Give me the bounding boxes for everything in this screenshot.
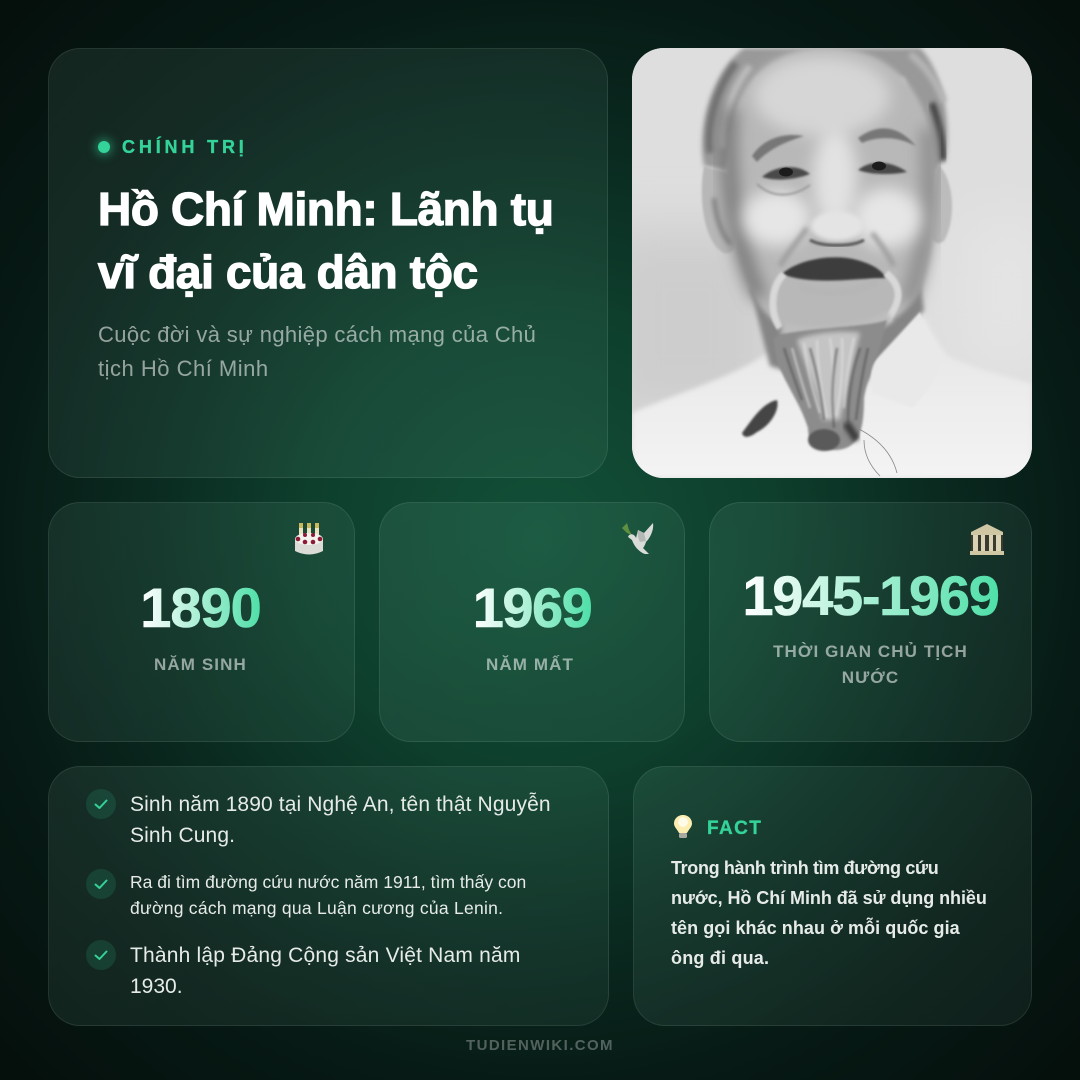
stat value: 1945-1969 (742, 564, 999, 627)
subtitle: tịch Hồ Chí Minh (98, 356, 269, 381)
face (727, 48, 936, 338)
panel: key points (48, 766, 609, 1026)
nose (811, 211, 863, 241)
icon: check (86, 869, 116, 899)
title: vĩ đại của dân tộc (98, 246, 478, 298)
stat card: birth year (48, 502, 355, 742)
point 3 (86, 940, 521, 998)
stat label: NƯỚC (842, 668, 899, 687)
portrait photo (632, 48, 1032, 478)
point text (130, 792, 551, 847)
backdrop (632, 48, 1032, 478)
stat label: NĂM SINH (154, 655, 247, 674)
icon: check (86, 789, 116, 819)
icon: birthday cake (295, 523, 323, 554)
hair (702, 48, 947, 173)
eyes (762, 167, 810, 180)
stat value: 1890 (140, 576, 261, 639)
icon: light bulb (674, 815, 692, 838)
fact text: tên gọi khác nhau ở mỗi quốc gia (671, 918, 960, 938)
stat label: THỜI GIAN CHỦ TỊCH (773, 642, 968, 661)
icon: classical building (970, 524, 1004, 555)
category dot (98, 141, 110, 153)
fact text (671, 858, 987, 968)
point text: Sinh năm 1890 tại Nghệ An, tên thật Nguyễn (130, 793, 551, 816)
stat card: death year (379, 502, 685, 742)
fact text: Trong hành trình tìm đường cứu (671, 858, 938, 878)
point text: 1930. (130, 975, 183, 998)
point text: Thành lập Đảng Cộng sản Việt Nam năm (130, 944, 521, 967)
collar (870, 312, 944, 408)
fact label: FACT (707, 818, 762, 839)
category label: CHÍNH TRỊ (122, 137, 248, 157)
fact text: nước, Hồ Chí Minh đã sử dụng nhiều (671, 888, 987, 908)
eyebrows (752, 135, 804, 162)
point text: Sinh Cung. (130, 824, 235, 847)
stat value: 1969 (473, 576, 592, 639)
moustache and beard (782, 257, 886, 281)
icon: dove (622, 523, 654, 554)
footer brand: TUDIENWIKI.COM (466, 1037, 614, 1054)
fact text: ông đi qua. (671, 948, 769, 968)
ears (702, 166, 736, 253)
shirt (632, 310, 1032, 478)
subtitle: Cuộc đời và sự nghiệp cách mạng của Chủ (98, 322, 536, 347)
neck shadow (750, 263, 924, 393)
panel: hero (48, 48, 608, 478)
title: Hồ Chí Minh: Lãnh tụ (98, 183, 553, 235)
point 2 (86, 869, 526, 918)
point text: đường cách mạng qua Luận cương của Lenin. (130, 898, 503, 918)
stat label (773, 642, 968, 687)
collar knot (742, 400, 778, 437)
icon: check (86, 940, 116, 970)
point 1 (86, 789, 551, 847)
point text (130, 944, 521, 998)
title (97, 183, 553, 298)
point text: Ra đi tìm đường cứu nước năm 1911, tìm thấy con (130, 872, 526, 892)
stat card: presidency (709, 502, 1032, 742)
point text (130, 872, 526, 918)
stat label: NĂM MẤT (486, 655, 574, 674)
panel: fact (633, 766, 1032, 1026)
subtitle (98, 322, 536, 381)
